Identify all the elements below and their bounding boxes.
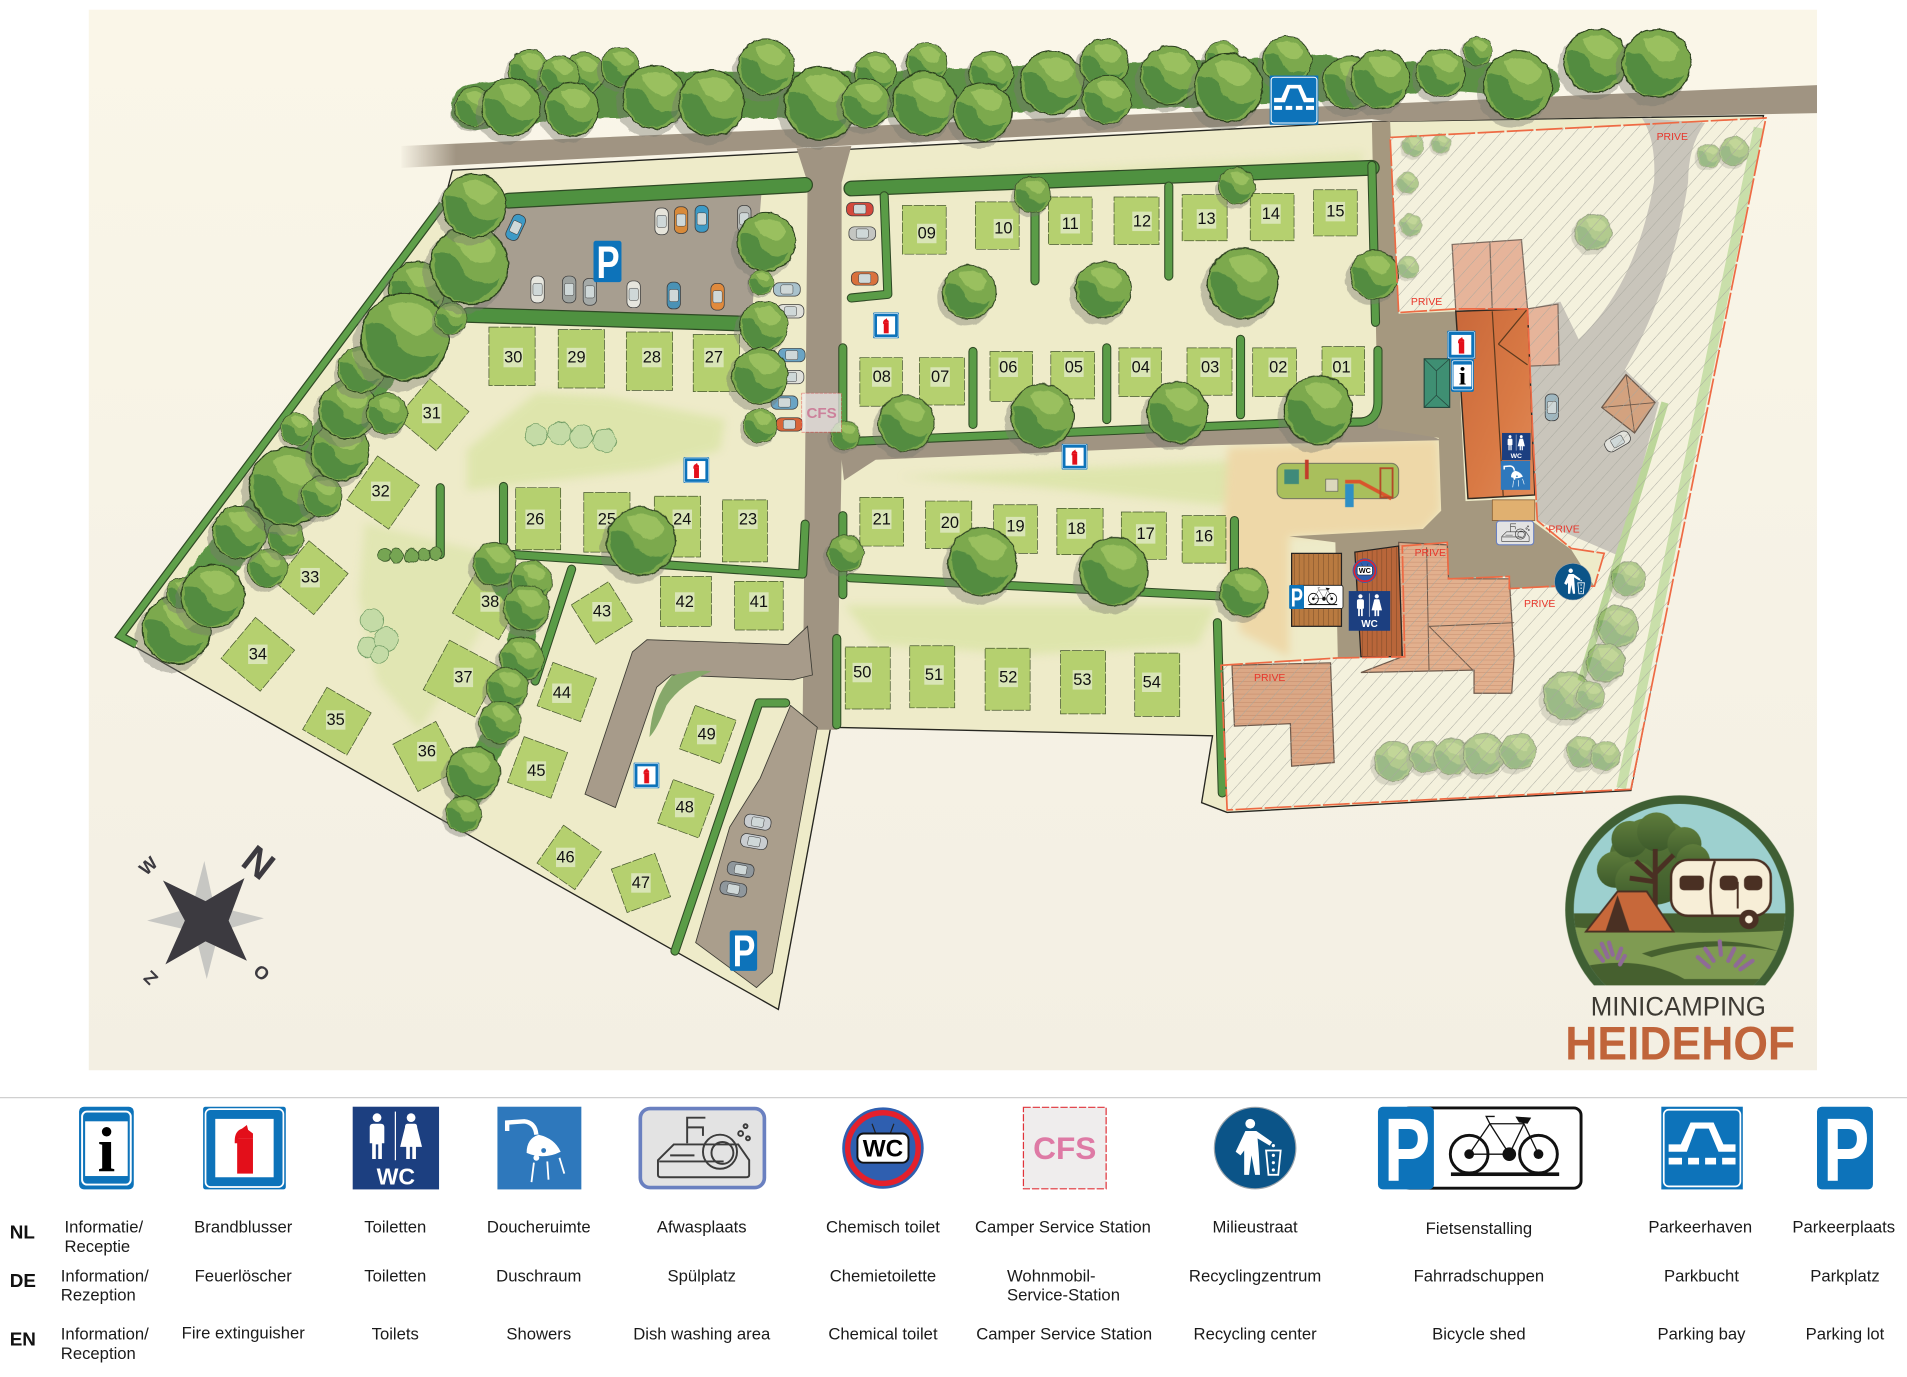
logo badge — [1565, 795, 1794, 986]
pitch 16 — [1182, 516, 1226, 563]
map sign: bike parking: P — [1291, 584, 1303, 613]
pitch 41: 41 — [750, 593, 768, 611]
pitch 24: 24 — [673, 510, 691, 528]
pitch 21: 21 — [873, 510, 891, 528]
legend: information: Rezeption — [61, 1286, 136, 1305]
map sign: recycling — [1555, 563, 1591, 600]
pitch 46 — [537, 825, 601, 890]
pitch 44 — [537, 662, 596, 722]
legend: camper service station: CFS — [1033, 1130, 1096, 1166]
legend divider — [0, 1097, 1907, 1099]
pitch 11 — [1048, 197, 1092, 244]
green stain on branch road — [649, 671, 711, 737]
private gravel drive — [1528, 118, 1705, 556]
hedges — [440, 165, 1378, 951]
flowering shrubs north — [525, 421, 616, 452]
pitch 54: 54 — [1143, 673, 1161, 691]
map sign: chemical toilet — [1353, 558, 1377, 583]
legend: chemical toilet: Chemical toilet — [828, 1325, 938, 1344]
legend: camper service station: Camper Service Station — [975, 1218, 1151, 1237]
legend: camper service station: Camper Service Station — [976, 1325, 1152, 1344]
pitch 28: 28 — [643, 349, 661, 367]
legend: bicycle parking: Fietsenstalling — [1426, 1219, 1532, 1238]
pitch 08: 08 — [873, 368, 891, 386]
pitch 04 — [1119, 348, 1161, 396]
pitch 07: 07 — [931, 368, 949, 386]
service yard — [1289, 122, 1594, 658]
compass rose: Z — [139, 967, 162, 989]
pitch 12 — [1114, 197, 1159, 244]
pitch 03 — [1187, 348, 1232, 395]
pitch 35 — [303, 687, 371, 755]
map panel — [89, 10, 1817, 1070]
legend: fire extinguisher: Feuerlöscher — [195, 1266, 292, 1285]
legend: information: Informatie/ — [64, 1218, 144, 1237]
pitch 36: 36 — [418, 743, 436, 761]
toilet block roof — [1355, 546, 1402, 657]
pitch 02: 02 — [1269, 358, 1287, 376]
pitch 29 — [558, 330, 604, 388]
pitch 52 — [985, 648, 1030, 710]
south-west building roof — [1232, 663, 1334, 766]
legend: camper service station: Wohnmobil- — [1007, 1266, 1096, 1285]
pitch 37 — [423, 640, 501, 717]
map sign: extinguisher 2 — [684, 457, 709, 483]
legend: recycling: Milieustraat — [1213, 1218, 1298, 1237]
pitch 06 — [990, 351, 1033, 401]
map sign: dish washing — [1496, 521, 1534, 545]
flowering shrubs south — [358, 609, 399, 663]
pitch 03: 03 — [1201, 358, 1219, 376]
compass rose: W — [135, 852, 162, 879]
gazebo roof — [1602, 375, 1655, 433]
tree column between 38 and 43 — [441, 542, 552, 836]
private area hatching and boundary — [1221, 118, 1766, 810]
playground — [1277, 460, 1399, 507]
tree row along north road — [451, 29, 1691, 149]
legend: dish washing: Afwasplaats — [657, 1218, 747, 1237]
legend: parking bay: Parking bay — [1657, 1325, 1746, 1344]
pitches — [221, 190, 1365, 913]
pitch 45: 45 — [527, 762, 545, 780]
pitch 43: 43 — [593, 603, 611, 621]
legend: showers: Showers — [506, 1325, 571, 1344]
pitch 09: 09 — [918, 225, 936, 243]
map sign: parking bay — [1270, 75, 1318, 125]
pitch 44: 44 — [553, 684, 571, 702]
legend: bicycle parking — [1378, 1101, 1581, 1344]
pitch 54 — [1135, 653, 1180, 716]
map sign: camper service station — [802, 393, 841, 432]
legend — [10, 1101, 1895, 1363]
legend: parking bay: Parkeerhaven — [1648, 1218, 1752, 1237]
pitch 12: 12 — [1133, 212, 1151, 230]
pitch 51 — [910, 646, 955, 708]
legend: toilets — [353, 1107, 439, 1344]
pitch 18: 18 — [1067, 520, 1085, 538]
pitch 16: 16 — [1195, 527, 1213, 545]
legend: information: Reception — [61, 1344, 136, 1363]
reception building north roof — [1452, 240, 1528, 311]
map sign: extinguisher 1 — [873, 313, 899, 338]
compass rose: O — [250, 960, 274, 985]
branch road — [585, 626, 812, 808]
private area pale ground — [1221, 118, 1766, 810]
pitch 37: 37 — [454, 668, 472, 686]
pitch 46: 46 — [556, 848, 575, 866]
pitch 20 — [926, 501, 972, 548]
map sign: bike parking — [1289, 584, 1343, 613]
map sign: showers — [1501, 461, 1530, 490]
pitch 15: 15 — [1326, 203, 1345, 221]
language labels: EN — [10, 1329, 36, 1350]
compass rose — [135, 838, 282, 989]
pitch 25: 25 — [598, 510, 616, 528]
pitch 35: 35 — [327, 711, 345, 729]
map sign: toilets — [1502, 433, 1531, 460]
legend: toilets: Toilets — [372, 1325, 419, 1344]
legend: toilets: Toiletten — [364, 1266, 426, 1285]
pitch 09 — [902, 206, 946, 254]
map sign: extinguisher 3 — [634, 763, 659, 788]
legend: chemical toilet: Chemietoilette — [830, 1266, 936, 1285]
pitch 23: 23 — [739, 510, 757, 528]
map sign: information — [1451, 359, 1474, 392]
pitch 10: 10 — [994, 220, 1012, 238]
pitch 14 — [1250, 193, 1294, 241]
legend: showers: Duschraum — [496, 1266, 581, 1285]
private shrubs — [1370, 134, 1749, 786]
green shed — [1424, 359, 1450, 407]
pitch 13: 13 — [1197, 210, 1216, 228]
legend: information: Information/ — [61, 1266, 149, 1285]
map sign: parking north: P — [597, 237, 620, 288]
reception side wing roof — [1528, 304, 1559, 366]
legend: camper service station: Service-Station — [1007, 1286, 1120, 1305]
legend: showers — [487, 1107, 591, 1344]
pitch 49: 49 — [697, 726, 716, 744]
pitch 50 — [845, 647, 890, 709]
pitch 18 — [1057, 508, 1103, 555]
language labels — [10, 1221, 36, 1350]
pitch 49 — [679, 705, 736, 764]
legend: bicycle parking: P — [1384, 1101, 1430, 1201]
pitch 10 — [975, 202, 1019, 249]
main road — [797, 146, 851, 730]
pitch 04: 04 — [1132, 358, 1150, 376]
pitch 19 — [994, 505, 1037, 553]
pitch 05 — [1051, 351, 1095, 399]
pitch 14: 14 — [1262, 205, 1280, 223]
PRIVE labels — [1254, 132, 1688, 684]
legend: chemical toilet: WC — [863, 1136, 903, 1163]
pitch 01 — [1322, 347, 1365, 395]
south gravel car park — [696, 705, 817, 988]
pitch 19: 19 — [1006, 518, 1025, 536]
PRIVE labels: PRIVE — [1254, 673, 1285, 684]
pitch 53: 53 — [1073, 671, 1092, 689]
language labels: NL — [10, 1221, 35, 1242]
pitch 32 — [347, 456, 419, 529]
pitch 17: 17 — [1137, 525, 1155, 543]
pitch 41 — [735, 581, 783, 630]
pitch 06: 06 — [999, 358, 1017, 376]
PRIVE labels: PRIVE — [1415, 548, 1446, 559]
PRIVE labels: PRIVE — [1524, 599, 1555, 610]
legend: toilets: WC — [377, 1164, 415, 1190]
PRIVE labels: PRIVE — [1411, 297, 1442, 308]
inner hedge strip east — [1581, 403, 1665, 681]
pitch 53 — [1061, 651, 1106, 714]
legend: parking lot: Parking lot — [1806, 1325, 1885, 1344]
PRIVE labels: PRIVE — [1548, 525, 1580, 536]
west boundary hedge fill — [120, 204, 443, 645]
pitch 21 — [860, 497, 904, 546]
pitch 50: 50 — [853, 664, 871, 682]
legend: parking lot — [1792, 1101, 1895, 1344]
legend: bicycle parking: Fahrradschuppen — [1414, 1266, 1544, 1285]
map paper background — [89, 10, 1817, 1070]
green washes on the lawns — [359, 152, 1417, 730]
legend: showers: Doucheruimte — [487, 1218, 591, 1237]
pitch 31: 31 — [423, 404, 441, 422]
legend: parking lot: Parkeerplaats — [1792, 1218, 1895, 1237]
pitch 42 — [660, 576, 711, 626]
pitch 33: 33 — [301, 569, 319, 587]
legend: bicycle parking: Bicycle shed — [1432, 1325, 1526, 1344]
legend: camper service station — [975, 1107, 1152, 1344]
pitch 32: 32 — [372, 482, 390, 500]
legend: information — [61, 1107, 149, 1363]
boundary strip east — [1621, 128, 1759, 788]
map sign: extinguisher 4 — [1062, 444, 1087, 470]
pitch 36 — [393, 721, 461, 792]
pitch 23 — [722, 500, 767, 562]
logo name small: MINICAMPING — [1591, 992, 1766, 1022]
bike shed roof — [1292, 553, 1341, 626]
tree belt along west boundary — [135, 174, 508, 673]
pitch 25 — [584, 493, 630, 552]
legend: information: i — [98, 1115, 115, 1185]
pitch 05: 05 — [1065, 358, 1083, 376]
parked cars — [504, 202, 1632, 898]
legend: dish washing: Dish washing area — [633, 1325, 771, 1344]
map sign: extinguisher 5 — [1447, 331, 1475, 359]
legend: recycling: Recyclingzentrum — [1189, 1266, 1321, 1285]
pitch 38 — [452, 567, 525, 640]
pitch 15 — [1313, 190, 1357, 236]
legend: parking bay: Parkbucht — [1664, 1266, 1739, 1285]
pitch 47: 47 — [632, 874, 650, 892]
pitch 34 — [221, 617, 295, 691]
legend: toilets: Toiletten — [364, 1218, 426, 1237]
legend: information: Information/ — [61, 1325, 149, 1344]
pitch 17 — [1121, 512, 1166, 559]
map sign: parking south: P — [733, 928, 755, 977]
private house roof — [1361, 542, 1514, 693]
pitch 31 — [397, 379, 469, 451]
trees among pitches — [600, 168, 1399, 623]
map sign: chemical toilet: WC — [1359, 566, 1372, 575]
pitch 20: 20 — [941, 514, 959, 532]
map sign: toilets: WC — [1511, 453, 1522, 460]
compass rose: N — [234, 838, 282, 889]
pitch 52: 52 — [999, 668, 1017, 686]
legend: chemical toilet — [826, 1107, 940, 1344]
pitch 48: 48 — [676, 799, 694, 817]
legend: fire extinguisher: Fire extinguisher — [182, 1323, 305, 1342]
north car park — [472, 195, 761, 319]
pitch 24 — [654, 496, 701, 557]
site lawn base — [118, 116, 1763, 1009]
pitch 26 — [516, 488, 561, 550]
legend: dish washing — [633, 1109, 771, 1344]
pitch 28 — [626, 332, 673, 390]
pitch 01: 01 — [1332, 358, 1351, 376]
map sign: toilets large: WC — [1361, 619, 1378, 630]
pitch 34: 34 — [249, 645, 267, 663]
legend: dish washing: Spülplatz — [667, 1266, 736, 1285]
legend: parking lot: Parkplatz — [1810, 1266, 1880, 1285]
map sign: information: i — [1459, 362, 1466, 390]
pitch 45 — [508, 737, 568, 798]
legend: chemical toilet: Chemisch toilet — [826, 1218, 940, 1237]
legend: parking lot: P — [1823, 1101, 1869, 1201]
pitch 08 — [860, 358, 902, 406]
map sign: camper service station: CFS — [806, 405, 837, 422]
reception building orange roof — [1456, 309, 1535, 499]
legend: recycling — [1189, 1107, 1321, 1344]
legend: recycling: Recycling center — [1194, 1325, 1317, 1344]
pitch 43 — [571, 582, 633, 644]
west boundary hedge — [120, 204, 443, 645]
map sign: toilets large — [1349, 591, 1390, 631]
road between pitch rows — [839, 416, 1441, 480]
pitch 29: 29 — [567, 349, 586, 367]
wooden deck — [1492, 500, 1535, 521]
north road — [401, 85, 1817, 168]
sand yard — [1222, 438, 1441, 657]
pitch 26: 26 — [526, 510, 544, 528]
pitch 27 — [693, 334, 739, 392]
pitch 11: 11 — [1062, 215, 1079, 233]
language labels: DE — [10, 1270, 36, 1291]
pitch 30: 30 — [504, 349, 522, 367]
logo — [1557, 795, 1812, 1070]
legend: fire extinguisher — [182, 1107, 305, 1342]
legend: information: Receptie — [64, 1237, 130, 1256]
pitch 48 — [657, 780, 714, 838]
PRIVE labels: PRIVE — [1657, 132, 1688, 143]
pitch 42: 42 — [676, 593, 694, 611]
legend: parking bay — [1648, 1107, 1752, 1344]
pitch 30 — [489, 327, 535, 386]
pitch 27: 27 — [705, 349, 723, 367]
pitch 02 — [1253, 348, 1296, 396]
pitch 33 — [275, 541, 348, 615]
legend: fire extinguisher: Brandblusser — [194, 1218, 293, 1237]
pitch 38: 38 — [481, 593, 499, 611]
trees east of north car park — [727, 213, 795, 447]
low shrub row — [378, 547, 441, 562]
logo name large: HEIDEHOF — [1565, 1017, 1795, 1070]
pitch 07 — [919, 358, 964, 405]
pitch 51: 51 — [925, 666, 943, 684]
pitch 47 — [611, 853, 671, 913]
pitch 13 — [1182, 195, 1227, 241]
